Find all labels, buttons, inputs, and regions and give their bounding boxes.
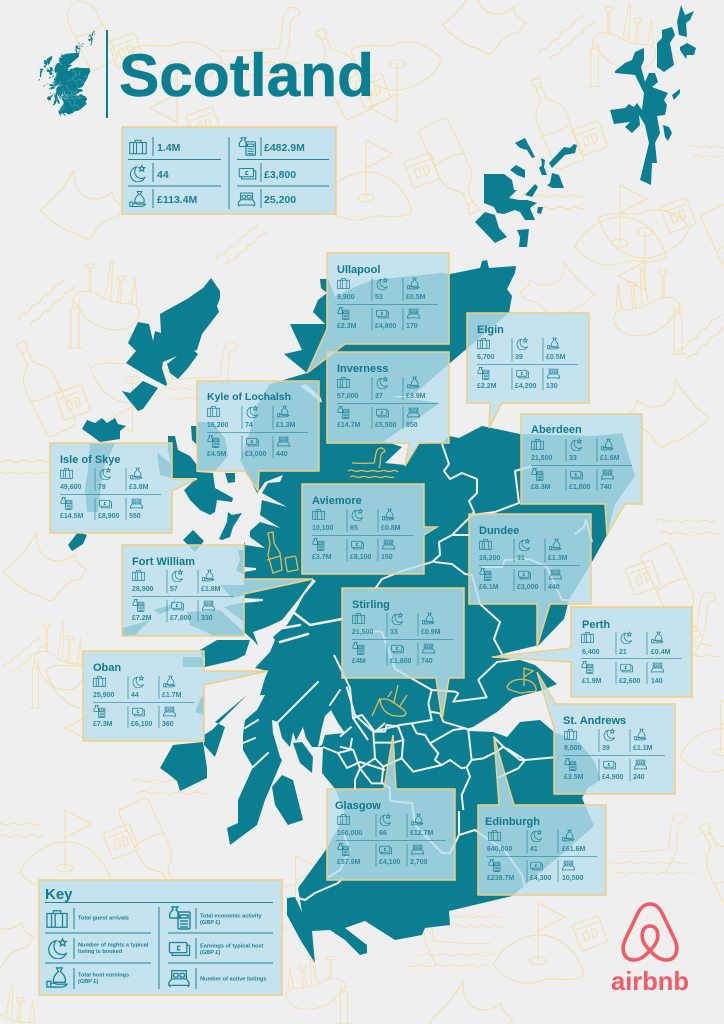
Aviemore values: £3.7M <box>312 554 332 561</box>
Elgin values: £0.5M <box>546 354 566 361</box>
Stirling values: 33 <box>390 629 398 636</box>
Oban values: £7.3M <box>93 721 113 728</box>
Glasgow values: £12.7M <box>410 830 434 837</box>
Perth values: 21 <box>619 649 627 656</box>
Aviemore values: 150 <box>381 554 393 561</box>
panel: Fort William <box>122 545 313 636</box>
Glasgow values: 2,700 <box>410 859 428 866</box>
key labels: (GBP £) <box>200 950 221 956</box>
key labels: Number of active listings <box>200 976 267 982</box>
key labels: Total host earnings <box>78 972 129 978</box>
key labels: (GBP £) <box>78 979 99 985</box>
Edinburgh values: £4,300 <box>530 875 552 882</box>
Kyle of Lochalsh values: 16,200 <box>207 422 229 429</box>
Glasgow title: Glasgow <box>335 800 381 812</box>
Dundee values: £1.3M <box>548 555 568 562</box>
Inverness values <box>337 393 426 429</box>
Isle of Skye values: £8,900 <box>98 513 120 520</box>
national total values: 44 <box>157 169 169 181</box>
Kyle of Lochalsh values: £4.5M <box>207 451 227 458</box>
key labels: Total guest arrivals <box>78 916 129 922</box>
national total values: £113.4M <box>157 194 198 206</box>
key labels: (GBP £) <box>200 920 221 926</box>
Glasgow values: £57.9M <box>337 859 361 866</box>
panel: key <box>39 880 282 995</box>
Glasgow values: £4,100 <box>379 859 401 866</box>
Aberdeen values: £1.6M <box>600 455 620 462</box>
Perth values: 140 <box>651 678 663 685</box>
St. Andrews values <box>564 745 653 781</box>
St. Andrews values: 39 <box>602 745 610 752</box>
Isle of Skye values: £3.8M <box>129 484 149 491</box>
Perth values <box>582 649 671 685</box>
Oban values: 360 <box>162 721 174 728</box>
Ullapool values: 53 <box>375 294 383 301</box>
national total values: 1.4M <box>157 142 181 154</box>
panel: Dundee <box>469 514 591 647</box>
Edinburgh values <box>487 846 586 882</box>
Edinburgh values: 10,500 <box>562 875 584 882</box>
Aviemore values: £0.8M <box>381 525 401 532</box>
Aberdeen values <box>531 455 620 491</box>
Aviemore values: £8,100 <box>350 554 372 561</box>
Perth title: Perth <box>582 619 610 631</box>
Kyle of Lochalsh title: Kyle of Lochalsh <box>207 391 291 403</box>
Oban values: £6,100 <box>131 721 153 728</box>
Isle of Skye title: Isle of Skye <box>60 454 121 466</box>
Oban title: Oban <box>93 662 121 674</box>
panel: Stirling <box>342 588 464 720</box>
Fort William values: 57 <box>170 586 178 593</box>
title: Scotland <box>119 42 374 109</box>
Oban values: 25,900 <box>93 692 115 699</box>
Perth values: £0.4M <box>651 649 671 656</box>
Ullapool values: £2.3M <box>337 323 357 330</box>
national total values: 25,200 <box>264 194 296 206</box>
Elgin values: £2.2M <box>477 383 497 390</box>
Aviemore values: 10,100 <box>312 525 334 532</box>
icon: whisky bottle and glass <box>267 532 298 573</box>
national total values: £482.9M <box>264 142 305 154</box>
key labels: Number of nights a typical <box>78 942 149 948</box>
national total values <box>157 142 305 206</box>
Dundee values: £6.1M <box>479 584 499 591</box>
Edinburgh values: £61.6M <box>562 846 586 853</box>
Kyle of Lochalsh values: 74 <box>245 422 253 429</box>
St. Andrews values: £3.5M <box>564 774 584 781</box>
national total values: £3,800 <box>264 169 296 181</box>
panel: Aberdeen <box>521 414 642 535</box>
Fort William values: £7.2M <box>132 615 152 622</box>
panel: Oban <box>83 651 268 741</box>
Perth values: £1.9M <box>582 678 602 685</box>
panel: Glasgow <box>327 735 455 880</box>
Dundee values: £3,000 <box>517 584 539 591</box>
Edinburgh values: 640,000 <box>487 846 512 853</box>
Fort William values: 330 <box>201 615 213 622</box>
national mini map <box>38 30 95 117</box>
Inverness values: 850 <box>406 422 418 429</box>
icon: loch ness monster <box>348 448 398 478</box>
St. Andrews values: 240 <box>633 774 645 781</box>
Dundee values: 16,200 <box>479 555 501 562</box>
key icons and rules <box>45 902 273 989</box>
key labels: listing is booked <box>78 949 123 955</box>
Fort William title: Fort William <box>132 556 195 568</box>
Inverness values: £3.9M <box>406 393 426 400</box>
Isle of Skye values: 79 <box>98 484 106 491</box>
Dundee values: 31 <box>517 555 525 562</box>
icon: golf flag <box>507 668 536 693</box>
Elgin values <box>477 354 566 390</box>
Aviemore values <box>312 525 401 561</box>
key labels <box>78 914 267 985</box>
St. Andrews values: £4,900 <box>602 774 624 781</box>
panel: Ullapool <box>307 253 449 373</box>
Inverness values: 57,000 <box>337 393 359 400</box>
key heading: Key <box>45 886 73 903</box>
Kyle of Lochalsh values: 440 <box>276 451 288 458</box>
Dundee title: Dundee <box>479 525 519 537</box>
Stirling values: £1,800 <box>390 658 412 665</box>
Aberdeen values: £1,800 <box>569 484 591 491</box>
Ullapool values <box>337 294 426 330</box>
Stirling title: Stirling <box>352 599 390 611</box>
panel: Elgin <box>467 313 589 428</box>
panel: Edinburgh <box>478 737 606 895</box>
Aberdeen values: 33 <box>569 455 577 462</box>
St. Andrews values: 9,500 <box>564 745 582 752</box>
panel: St. Andrews <box>537 672 675 794</box>
Fort William values <box>132 586 221 622</box>
panel: Inverness <box>327 352 449 466</box>
Inverness title: Inverness <box>337 363 388 375</box>
Edinburgh title: Edinburgh <box>485 816 540 828</box>
St. Andrews values: £1.1M <box>633 745 653 752</box>
panel: national totals <box>122 127 336 214</box>
Perth values: £2,600 <box>619 678 641 685</box>
Stirling values: 21,500 <box>352 629 374 636</box>
Dundee values <box>479 555 568 591</box>
Fort William values: £7,800 <box>170 615 192 622</box>
Isle of Skye values: 550 <box>129 513 141 520</box>
Isle of Skye values <box>60 484 149 520</box>
Aberdeen values: 740 <box>600 484 612 491</box>
Aviemore title: Aviemore <box>312 495 362 507</box>
panel: Kyle of Lochalsh <box>197 381 319 491</box>
Ullapool values: £0.5M <box>406 294 426 301</box>
Ullapool values: 9,900 <box>337 294 355 301</box>
Dundee values: 440 <box>548 584 560 591</box>
Glasgow values: 160,000 <box>337 830 362 837</box>
key labels: Earnings of typical host <box>200 944 264 950</box>
panel: Aviemore <box>302 484 437 574</box>
Inverness values: £14.7M <box>337 422 361 429</box>
Ullapool values: £4,800 <box>375 323 397 330</box>
Perth values: 6,400 <box>582 649 600 656</box>
Fort William values: 28,900 <box>132 586 154 593</box>
St. Andrews title: St. Andrews <box>563 715 626 727</box>
Ullapool values: 170 <box>406 323 418 330</box>
Stirling values: £4M <box>352 658 366 665</box>
Elgin values: 39 <box>515 354 523 361</box>
Isle of Skye values: 49,600 <box>60 484 82 491</box>
Kyle of Lochalsh values: £1.3M <box>276 422 296 429</box>
national total icons <box>128 137 329 209</box>
Aberdeen values: 21,500 <box>531 455 553 462</box>
Oban values <box>93 692 182 728</box>
panel: Perth <box>492 607 692 697</box>
Oban values: 44 <box>131 692 139 699</box>
icon: bagpipes <box>372 685 407 716</box>
Inverness values: 37 <box>375 393 383 400</box>
panel: Isle of Skye <box>50 443 197 533</box>
Elgin values: 6,700 <box>477 354 495 361</box>
Glasgow values <box>337 830 434 866</box>
Stirling values: £0.9M <box>421 629 441 636</box>
airbnb wordmark: airbnb <box>611 966 689 996</box>
Isle of Skye values: £14.5M <box>60 513 84 520</box>
Elgin title: Elgin <box>477 324 504 336</box>
Aviemore values: 65 <box>350 525 358 532</box>
Ullapool title: Ullapool <box>337 264 380 276</box>
Aberdeen values: £8.3M <box>531 484 551 491</box>
Edinburgh values: 41 <box>530 846 538 853</box>
Aberdeen title: Aberdeen <box>531 424 582 436</box>
Stirling values <box>352 629 441 665</box>
Kyle of Lochalsh values <box>207 422 296 458</box>
Glasgow values: 66 <box>379 830 387 837</box>
icon: airbnb logo <box>623 904 677 960</box>
title divider <box>106 30 108 118</box>
Oban values: £1.7M <box>162 692 182 699</box>
key labels: Total economic activity <box>200 914 262 920</box>
Stirling values: 740 <box>421 658 433 665</box>
Inverness values: £5,500 <box>375 422 397 429</box>
Elgin values: £4,200 <box>515 383 537 390</box>
Fort William values: £1.8M <box>201 586 221 593</box>
Elgin values: 130 <box>546 383 558 390</box>
Edinburgh values: £238.7M <box>487 875 514 882</box>
Kyle of Lochalsh values: £3,000 <box>245 451 267 458</box>
